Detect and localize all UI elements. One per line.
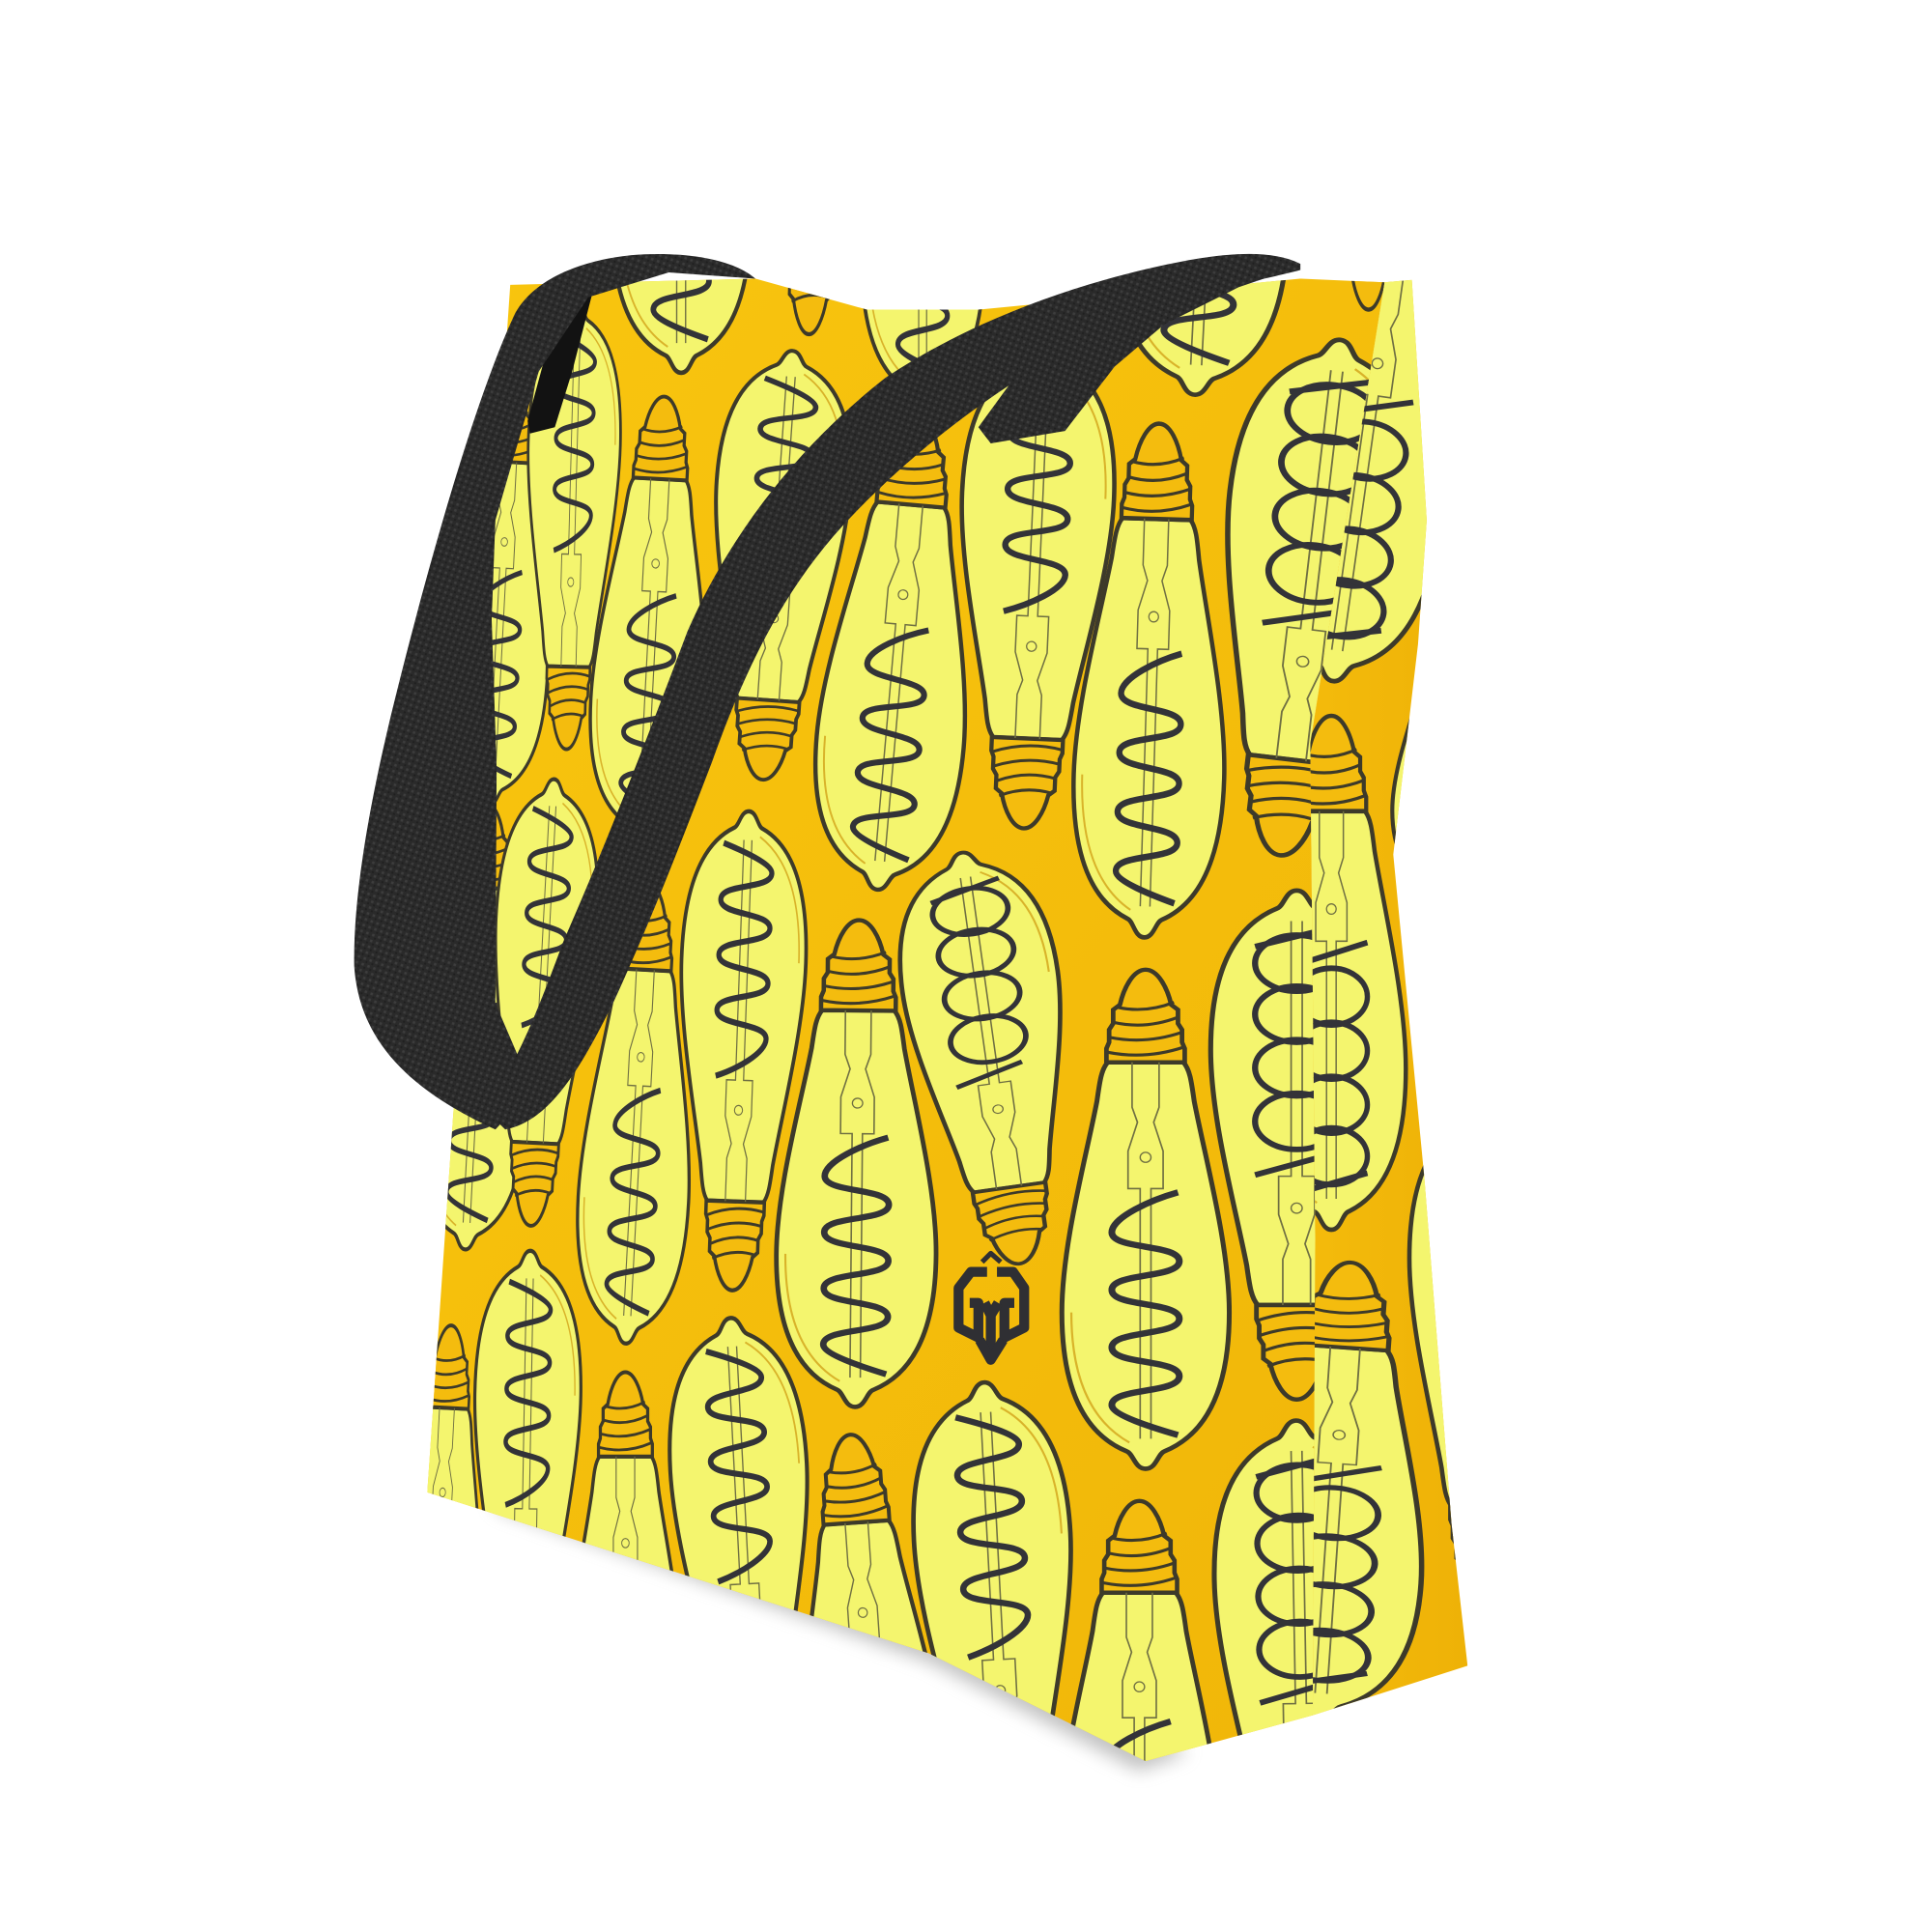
- wide bulbs with looped filament: [885, 329, 1432, 1926]
- panel: bag side gusset: [1310, 280, 1468, 1716]
- side bulbs: [1310, 280, 1456, 1716]
- ground shadow: [496, 1492, 1189, 1771]
- strap: left loop: [355, 254, 755, 1129]
- icon: brand logo: [958, 1253, 1024, 1360]
- bulbs with the base at the top: [568, 0, 1305, 1932]
- strap: rear tab right: [979, 267, 1300, 443]
- strap: rear tab left: [527, 295, 592, 434]
- strap: main front band: [465, 254, 1300, 1129]
- bulbs with the base at the bottom: [469, 0, 1422, 1880]
- illustration: tote bag with light bulb print: [354, 253, 1468, 1777]
- bulb row: left slivers: [427, 411, 547, 1509]
- panel: bag front face: [427, 278, 1385, 1762]
